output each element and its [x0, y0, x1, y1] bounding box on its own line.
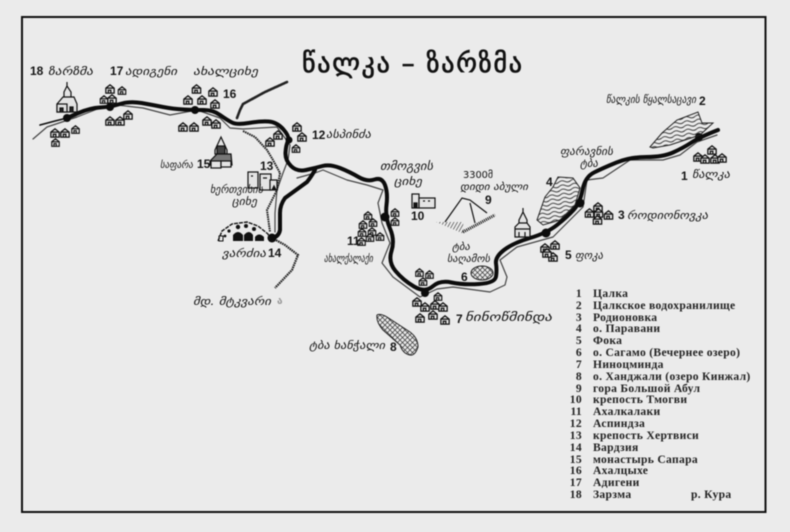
- river Kura: [33, 105, 717, 297]
- legend: монастырь Сапара: [593, 453, 698, 466]
- label 5: ფოკა: [575, 249, 603, 262]
- label river: ა: [277, 296, 283, 307]
- label 1: წალკა: [692, 168, 730, 181]
- label 11: 11: [347, 234, 360, 248]
- label 18: 18: [30, 64, 44, 78]
- legend: 7: [576, 358, 582, 371]
- label 10: ციხე: [393, 175, 424, 188]
- label 2: წალკის წყალსაცავი: [606, 93, 697, 106]
- legend: 8: [576, 370, 582, 383]
- label 8: 8: [390, 340, 397, 354]
- legend: 10: [570, 393, 582, 406]
- label river: მდ. მტკვარი: [193, 295, 273, 308]
- legend: Адигени: [593, 476, 640, 489]
- label 12: [312, 128, 371, 142]
- houses: Tsalka: [694, 146, 726, 163]
- label 7: ნინოწმინდა: [465, 310, 553, 324]
- label 5: 5: [565, 248, 572, 262]
- legend: 13: [570, 429, 582, 442]
- legend: Цалка: [593, 287, 628, 300]
- label 1: 1: [681, 169, 688, 183]
- label 7: [456, 310, 553, 326]
- legend: Фока: [593, 334, 622, 347]
- legend: р. Кура: [691, 488, 732, 501]
- label 4: ფარავნის: [560, 145, 613, 158]
- label 4: ტბა: [580, 157, 598, 170]
- legend: Цалкское водохранилище: [593, 299, 735, 312]
- label 10: [380, 159, 434, 223]
- label 17: [110, 64, 260, 78]
- side stream near Khertvisi: [243, 131, 280, 232]
- label 17: ადიგენი: [125, 65, 179, 78]
- legend: Вардзия: [593, 441, 639, 454]
- label 15: საფარა: [160, 159, 194, 171]
- houses: Zarzma: [51, 126, 79, 146]
- label 17: ახალციხე: [193, 65, 260, 78]
- label 9: 9: [485, 193, 492, 207]
- legend: 18: [570, 488, 582, 501]
- houses: Phoka: [541, 241, 559, 261]
- label 13: [210, 159, 274, 208]
- label 6: 6: [461, 270, 468, 284]
- tributary upper stream: [237, 82, 287, 118]
- legend: крепость Тмогви: [593, 393, 687, 406]
- legend: 14: [570, 441, 582, 454]
- label 9: დიდი აბული: [460, 181, 529, 193]
- tributary river a: [272, 238, 298, 288]
- label 14: [221, 246, 282, 260]
- legend: 15: [570, 453, 582, 466]
- label 2: 2: [699, 94, 706, 108]
- legend: 9: [576, 382, 582, 395]
- mountain 9: Great Abuli: [436, 198, 495, 234]
- label 16: 16: [223, 87, 237, 101]
- houses: Adigeni: [100, 85, 132, 125]
- legend: Родионовка: [593, 311, 657, 324]
- label 15: 15: [197, 157, 211, 171]
- map labels: [30, 64, 730, 354]
- lake 4: Paravani: [537, 177, 580, 225]
- legend: гора Большой Абул: [593, 382, 700, 395]
- label 13: ციხე: [231, 196, 258, 208]
- fortress 13: Khertvisi: [248, 172, 277, 190]
- legend: Аспиндза: [593, 417, 645, 430]
- label 14: ვარძია: [221, 248, 267, 260]
- legend: о. Паравани: [593, 322, 660, 335]
- label 17: 17: [110, 64, 124, 78]
- label 5: [565, 248, 603, 262]
- legend: 2: [576, 299, 582, 312]
- lake 2: Tsalka reservoir: [650, 112, 713, 148]
- legend: 1: [576, 287, 582, 300]
- church 18: Zarzma: [57, 82, 77, 112]
- label 8: ტბა ხანჭალი: [309, 339, 386, 352]
- Vardzia cave town: [218, 222, 270, 241]
- label 4: [546, 145, 613, 189]
- label 13: ხერთვისის: [210, 184, 263, 196]
- label 13: 13: [260, 159, 274, 173]
- legend: 4: [576, 322, 582, 335]
- legend: 17: [570, 476, 582, 489]
- label 4: 4: [546, 175, 553, 189]
- lake 8: Khanchali: [377, 314, 418, 355]
- legend: крепость Хертвиси: [593, 429, 699, 442]
- legend: Ниноцминда: [593, 358, 664, 371]
- legend: 3: [576, 311, 582, 324]
- label 12: ასპინძა: [326, 128, 371, 141]
- church near Paravani: [515, 208, 530, 237]
- label 18: ზარზმა: [48, 65, 94, 78]
- legend: 16: [570, 464, 582, 477]
- label 6: [447, 241, 491, 284]
- label 6: საღამოს: [447, 253, 491, 265]
- legend: Зарзма: [593, 488, 631, 501]
- label 12: 12: [312, 128, 326, 142]
- label 10: 10: [411, 209, 425, 223]
- fortress 10: Tmogvi: [412, 194, 435, 208]
- legend: 6: [576, 346, 582, 359]
- legend: 5: [576, 334, 582, 347]
- houses: Akhalkalaki: [358, 209, 399, 245]
- road stops: [63, 103, 703, 297]
- label 11: [324, 234, 373, 265]
- legend: Ахалкалаки: [593, 405, 661, 418]
- label 14: 14: [268, 246, 282, 260]
- legend: 11: [570, 405, 582, 418]
- label 3: როდიონოვკა: [627, 209, 708, 222]
- houses: Akhaltsikhe: [179, 85, 220, 131]
- label 11: ახალქალაქი: [324, 253, 373, 265]
- label 3: 3: [618, 208, 625, 222]
- legend: о. Ханджали (озеро Кинжал): [593, 370, 751, 383]
- title: წალკა – ზარზმა: [302, 49, 522, 79]
- main road: [40, 102, 718, 290]
- houses: Rodionovka: [585, 203, 613, 224]
- label 10: თმოგვის: [380, 159, 434, 173]
- label 7: 7: [456, 312, 463, 326]
- houses: Aspindza: [266, 123, 306, 152]
- lake 6: Sagamo: [471, 266, 493, 280]
- label 1: [681, 168, 730, 183]
- monastery 15: Sapara: [210, 137, 232, 168]
- label 8: [309, 339, 397, 354]
- label 15: [160, 157, 211, 171]
- label 9: [460, 170, 529, 207]
- label 18: [30, 64, 94, 78]
- houses: Ninotsminda: [413, 269, 449, 324]
- legend: Ахалцыхе: [593, 464, 648, 477]
- label 6: ტბა: [452, 241, 471, 253]
- legend: о. Сагамо (Вечернее озеро): [593, 346, 740, 359]
- legend: 12: [570, 417, 582, 430]
- legend: [570, 287, 751, 501]
- label 9: 3300მ: [463, 170, 493, 181]
